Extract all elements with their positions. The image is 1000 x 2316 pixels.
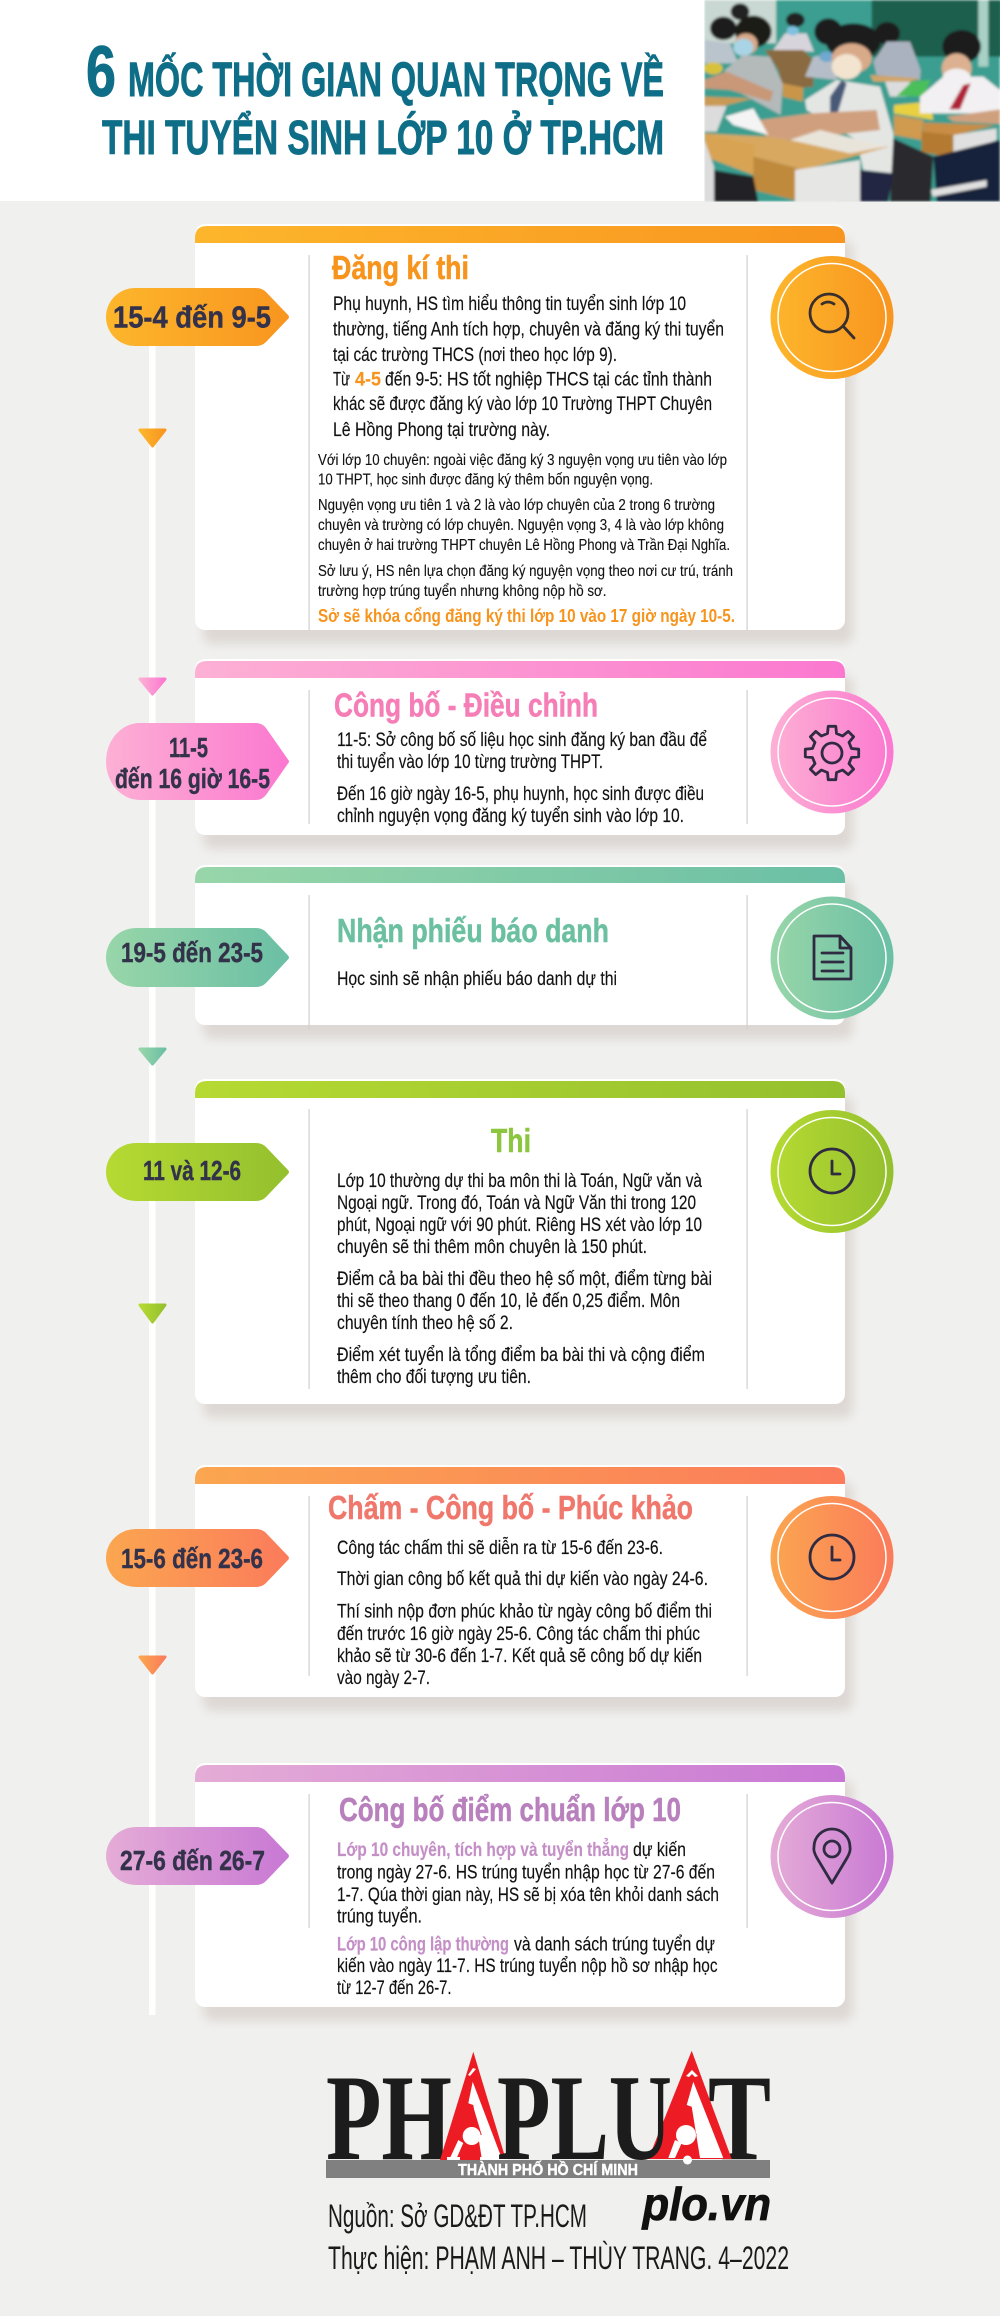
arrow marker (140, 430, 165, 446)
card top bar (195, 1467, 845, 1484)
date tag: 19-5 đến 23-5 (121, 937, 263, 968)
text block: Phụ huynh, HS tìm hiểu thông tin tuyển sinh lớp 10 (333, 294, 686, 315)
photo: students in classroom wearing masks (704, 0, 1000, 202)
text block: Lớp 10 chuyên, tích hợp và tuyển thẳng (337, 1839, 629, 1861)
text block: Từ (333, 370, 350, 390)
card body (195, 1079, 845, 1404)
card shadow (203, 1780, 853, 2021)
icon: gear (770, 690, 894, 814)
deadline note: Sở sẽ khóa cổng đăng ký thi lớp 10 vào 17 giờ ngày 10-5. (318, 606, 735, 626)
text block (337, 1839, 719, 1999)
text block: Đến 16 giờ ngày 16-5, phụ huynh, học sinh được điều (337, 784, 704, 805)
small text block: trường hợp trúng tuyển nhưng không nộp hồ sơ. (318, 583, 606, 600)
date tag (106, 928, 289, 987)
text block: vào ngày 2-7. (337, 1668, 430, 1689)
arrow marker (140, 679, 165, 694)
logo red letter Á (440, 2052, 508, 2160)
panel: Thi (106, 1079, 894, 1418)
panel: Chấm - Công bố - Phúc khảo (106, 1465, 894, 1711)
card shadow (203, 1096, 853, 1418)
text block: thi sẽ theo thang 0 đến 10, lẻ đến 0,25 điểm. Môn (337, 1291, 680, 1312)
panel: Công bố - Điều chỉnh (106, 659, 894, 849)
title: THI TUYỂN SINH LỚP 10 Ở TP.HCM (102, 110, 664, 165)
header band (0, 0, 1000, 201)
card top bar (195, 867, 845, 883)
text block: dự kiến (633, 1840, 686, 1861)
text block: Ngoại ngữ. Trong đó, Toán và Ngữ Văn thi trong 120 (337, 1193, 696, 1214)
text block: chỉnh nguyện vọng đăng ký tuyển sinh vào lớp 10. (337, 806, 684, 827)
text block: 1-7. Qúa thời gian này, HS sẽ bị xóa tên khỏi danh sách (337, 1885, 719, 1906)
logo black letters behind: T (708, 2049, 771, 2186)
small text block: Nguyện vọng ưu tiên 1 và 2 là vào lớp chuyên của 2 trong 6 trường (318, 497, 715, 514)
card top bar (195, 661, 845, 678)
text block: thêm cho đối tượng ưu tiên. (337, 1367, 531, 1388)
text block: trúng tuyển. (337, 1906, 422, 1928)
text block: Công tác chấm thi sẽ diễn ra từ 15-6 đến 23-6. (337, 1537, 663, 1559)
text block: Thời gian công bố kết quả thi dự kiến vào ngày 24-6. (337, 1569, 708, 1590)
text block: kiến vào ngày 11-7. HS trúng tuyển nộp hồ sơ nhập học (337, 1956, 718, 1977)
card top bar (195, 1765, 845, 1782)
heading: Công bố điểm chuẩn lớp 10 (339, 1791, 681, 1828)
icon: document (770, 896, 894, 1020)
text block: 11-5: Sở công bố số liệu học sinh đăng ký ban đầu để (337, 730, 707, 751)
text block: và danh sách trúng tuyển dự (514, 1934, 715, 1956)
date tag (106, 1529, 289, 1587)
small text block (318, 452, 733, 600)
icon: clock (770, 1496, 894, 1619)
icon: clock (770, 1110, 894, 1233)
text block: Điểm cả ba bài thi đều theo hệ số một, điểm từng bài (337, 1269, 712, 1290)
card shadow (203, 881, 853, 1039)
panel: Nhận phiếu báo danh (106, 865, 894, 1064)
text block: trong ngày 27-6. HS trúng tuyển nhập học từ 27-6 đến (337, 1862, 715, 1884)
title: MỐC THỜI GIAN QUAN TRỌNG VỀ (128, 52, 664, 107)
logo red letter Â (648, 2051, 732, 2159)
logo subtitle: THÀNH PHỐ HỒ CHÍ MINH (458, 2161, 638, 2179)
title: 6 (86, 33, 116, 112)
logo black letters behind: PH (326, 2049, 452, 2186)
text block: khảo sẽ từ 30-6 đến 1-7. Kết quả sẽ công bố dự kiến (337, 1646, 702, 1667)
icon: map pin (770, 1795, 894, 1918)
text block: đến trước 16 giờ ngày 25-6. Công tác chấm thi phúc (337, 1624, 700, 1645)
logo black letters behind (326, 2049, 771, 2186)
heading: Nhận phiếu báo danh (337, 912, 609, 949)
text block: Lớp 10 công lập thường (337, 1934, 509, 1956)
heading: Đăng kí thi (332, 249, 469, 286)
logo grey bar (326, 2160, 770, 2178)
text block (337, 730, 707, 827)
text block: Thí sinh nộp đơn phúc khảo từ ngày công bố điểm thi (337, 1602, 712, 1622)
icon: magnifying glass (770, 256, 894, 379)
date tag: đến 16 giờ 16-5 (115, 763, 270, 794)
heading: Công bố - Điều chỉnh (334, 686, 598, 724)
text block (337, 1171, 712, 1388)
card top bar (195, 1081, 845, 1098)
card shadow (203, 240, 853, 644)
text block: chuyên tính theo hệ số 2. (337, 1313, 513, 1334)
logo black letters front: PLU (497, 2049, 672, 2186)
card shadow (203, 675, 853, 849)
text block: Điểm xét tuyển là tổng điểm ba bài thi và cộng điểm (337, 1345, 705, 1366)
text block: Lê Hồng Phong tại trường này. (333, 420, 550, 441)
text block: thi tuyển vào lớp 10 từng trường THPT. (337, 752, 603, 773)
date tag: 15-4 đến 9-5 (113, 300, 271, 334)
card shadow (203, 1482, 853, 1711)
small text block: chuyên và trường có lớp chuyên. Nguyện vọng 3, 4 là vào lớp không (318, 517, 724, 534)
date tag: 11 và 12-6 (143, 1155, 241, 1186)
date tag (106, 1827, 289, 1885)
date tag (106, 723, 289, 800)
small text block: Sở lưu ý, HS nên lựa chọn đăng ký nguyện vọng theo nơi cư trú, tránh (318, 563, 733, 580)
website: plo.vn (641, 2178, 771, 2230)
text block: Học sinh sẽ nhận phiếu báo danh dự thi (337, 969, 617, 990)
small text block: Với lớp 10 chuyên: ngoài việc đăng ký 3 nguyện vọng ưu tiên vào lớp (318, 452, 727, 469)
timeline line (149, 300, 156, 2015)
card body (195, 224, 845, 630)
small text block: 10 THPT, học sinh được đăng ký thêm bốn nguyện vọng. (318, 472, 653, 488)
text block: tại các trường THCS (nơi theo học lớp 9). (333, 345, 617, 366)
text block: chuyên sẽ thi thêm môn chuyên là 150 phút. (337, 1237, 647, 1258)
arrow marker (140, 1305, 165, 1322)
text block (333, 294, 724, 441)
logo dot (683, 2156, 692, 2164)
arrow marker (140, 1657, 165, 1673)
title (86, 33, 664, 165)
arrow marker (140, 1049, 165, 1064)
heading: Thi (491, 1122, 531, 1159)
text block: phút, Ngoại ngữ với 90 phút. Riêng HS xét vào lớp 10 (337, 1215, 702, 1236)
text block: đến 9-5: HS tốt nghiệp THCS tại các tỉnh thành (385, 370, 712, 390)
date tag: 15-6 đến 23-6 (121, 1543, 263, 1574)
small text block: chuyên ở hai trường THPT chuyên Lê Hồng Phong và Trần Đại Nghĩa. (318, 537, 730, 554)
text block: Lớp 10 thường dự thi ba môn thi là Toán, Ngữ văn và (337, 1171, 702, 1192)
source credit: Nguồn: Sở GD&ĐT TP.HCM (328, 2198, 587, 2234)
card body (195, 1763, 845, 2007)
logo: Pháp Luật TP.HCM (326, 2049, 771, 2186)
date tag (106, 288, 289, 346)
heading: Chấm - Công bố - Phúc khảo (328, 1489, 693, 1526)
date tag (106, 1143, 289, 1201)
card body (195, 1465, 845, 1697)
card top bar (195, 226, 845, 243)
text block: khác sẽ được đăng ký vào lớp 10 Trường THPT Chuyên (333, 394, 712, 415)
date tag: 27-6 đến 26-7 (120, 1845, 265, 1876)
text block: thường, tiếng Anh tích hợp, chuyên và đăng ký thi tuyển (333, 320, 724, 340)
date tag: 11-5 (169, 732, 208, 763)
text block (337, 1537, 712, 1689)
text block: 4-5 (355, 370, 381, 390)
card body (195, 659, 845, 835)
panel: Đăng kí thi (106, 224, 894, 644)
panel: Công bố điểm chuẩn lớp 10 (106, 1763, 894, 2021)
text block: từ 12-7 đến 26-7. (337, 1978, 452, 1999)
card body (195, 865, 845, 1025)
